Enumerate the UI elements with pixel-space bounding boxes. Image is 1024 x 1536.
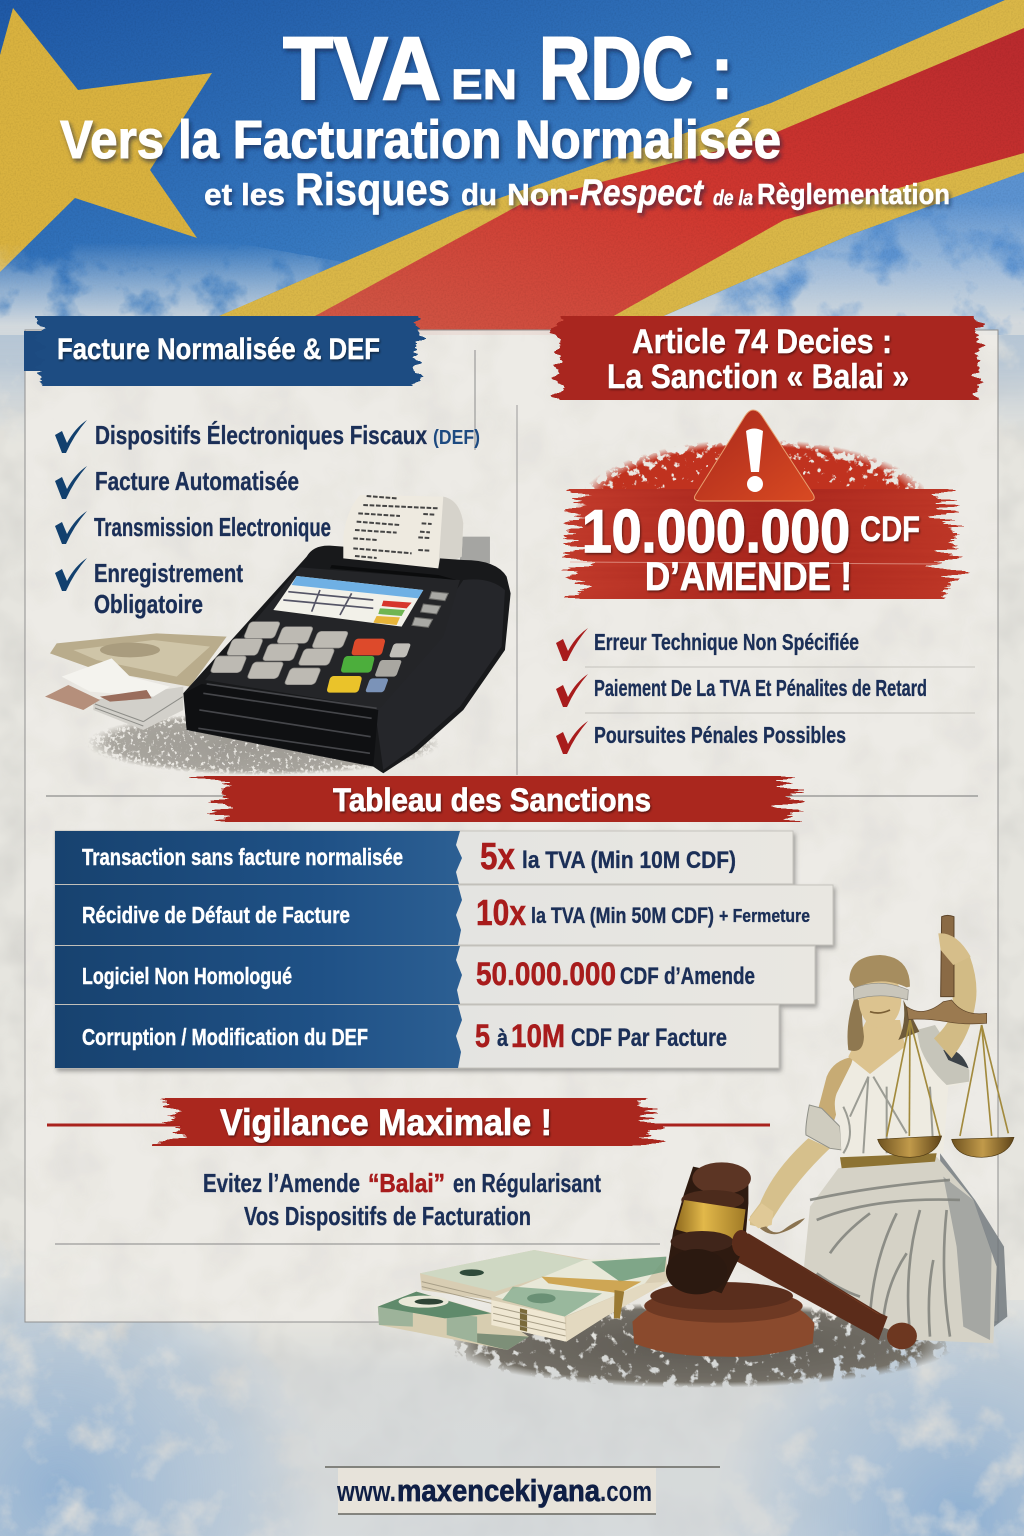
row: logiciel non homologué: Logiciel Non Homologué	[82, 963, 292, 989]
website footer: www.	[336, 1476, 396, 1508]
sanctions table	[55, 831, 833, 1068]
title block: RDC	[539, 18, 693, 118]
row: corruption: CDF Par Facture	[571, 1024, 727, 1052]
flag of DR Congo banner	[0, 0, 1024, 335]
row: récidive: + Fermeture	[719, 906, 810, 926]
heading banner: Facture Normalisée	[24, 316, 418, 386]
title block: Règlementation	[757, 179, 950, 211]
title block: de la	[713, 187, 753, 210]
panel: Facture Normalisée et DEF	[23, 316, 511, 787]
checklist: consequences	[556, 628, 975, 754]
row: corruption	[55, 1005, 779, 1068]
sanctions table heading banner: Tableau des Sanctions	[333, 782, 651, 818]
checklist: DEF features: Enregistrement	[94, 558, 243, 588]
icon: warning triangle	[694, 410, 814, 501]
row: logiciel non homologué	[55, 946, 815, 1004]
row: récidive: la TVA (Min 50M CDF)	[531, 903, 714, 928]
checklist: DEF features: Obligatoire	[94, 589, 203, 619]
checklist: consequences: Erreur Technique Non Spécifiée	[594, 629, 859, 655]
row: récidive: 10x	[476, 892, 526, 933]
website footer: maxencekiyana	[397, 1473, 601, 1508]
title block: EN	[451, 61, 517, 109]
row: corruption: 5	[475, 1018, 490, 1054]
title block: et les	[204, 177, 285, 212]
illustration: POS fiscal device with receipt	[183, 495, 511, 773]
row: corruption: à	[497, 1025, 509, 1052]
title block: Non-	[507, 177, 579, 212]
title block: Respect	[580, 172, 704, 213]
row: transaction sans facture: la TVA (Min 10M CDF)	[522, 847, 736, 874]
panel: Article 74 Decies	[515, 316, 995, 754]
title block: Risques	[295, 164, 450, 215]
fine amount badge: D’AMENDE !	[645, 555, 852, 599]
title block: TVA	[283, 18, 441, 118]
illustration: Lady Justice statue	[748, 915, 1014, 1343]
heading banner: Article 74 Decies	[558, 316, 978, 400]
website footer: .com	[600, 1476, 652, 1508]
fine amount badge: 10.000.000	[582, 498, 850, 565]
illustration: cash and papers	[23, 633, 503, 787]
row: logiciel non homologué: 50.000.000	[476, 956, 616, 992]
title block: Vers la Facturation Normalisée	[60, 110, 781, 170]
background: left and right margin wash	[0, 335, 1024, 465]
heading banner: Article 74 Decies: Article 74 Decies :	[632, 323, 892, 361]
call to action text: Evitez l’Amende	[203, 1168, 360, 1198]
call to action text	[203, 1168, 601, 1231]
title block: du	[461, 177, 497, 212]
row: corruption: 10M	[511, 1018, 565, 1054]
checklist: consequences: Poursuites Pénales Possibles	[594, 722, 846, 748]
call to action text: Vos Dispositifs de Facturation	[244, 1201, 531, 1231]
title block	[60, 18, 950, 215]
row: corruption: Corruption / Modification du DEF	[82, 1024, 368, 1050]
background: grey wash at bottom	[0, 1320, 1024, 1536]
heading banner: Facture Normalisée: Facture Normalisée & DEF	[57, 333, 380, 366]
heading banner: Article 74 Decies: La Sanction « Balai »	[607, 358, 909, 396]
row: logiciel non homologué: CDF d’Amende	[620, 963, 755, 990]
row: transaction sans facture: 5x	[480, 836, 515, 878]
row: récidive: Récidive de Défaut de Facture	[82, 902, 350, 928]
row: transaction sans facture	[55, 831, 793, 884]
checklist: DEF features: (DEF)	[433, 427, 480, 449]
checklist: DEF features: Facture Automatisée	[95, 466, 299, 496]
row: transaction sans facture: Transaction sans facture normalisée	[82, 844, 403, 870]
main panel frame	[25, 330, 998, 1322]
call to action text: “Balai”	[368, 1168, 445, 1198]
call to action text: en Régularisant	[453, 1168, 601, 1198]
row: récidive	[55, 885, 833, 945]
vigilance banner	[47, 1098, 770, 1146]
background: stone floor grit under gavel	[355, 1287, 1024, 1403]
sanctions table heading banner	[220, 776, 790, 822]
checklist: DEF features	[55, 420, 480, 619]
background: blue watercolor patches	[0, 1240, 1024, 1536]
fine amount badge	[515, 410, 995, 605]
checklist: DEF features: Transmission Electronique	[94, 512, 331, 542]
checklist: DEF features: Dispositifs Électroniques Fiscaux	[95, 420, 427, 450]
website footer	[325, 1467, 720, 1514]
fine amount badge: CDF	[860, 510, 920, 549]
illustration: banknote stacks	[378, 1250, 668, 1350]
vigilance banner: Vigilance Maximale !	[220, 1102, 552, 1143]
illustration: gavel and sound block	[632, 1162, 917, 1357]
title block: :	[710, 28, 734, 116]
